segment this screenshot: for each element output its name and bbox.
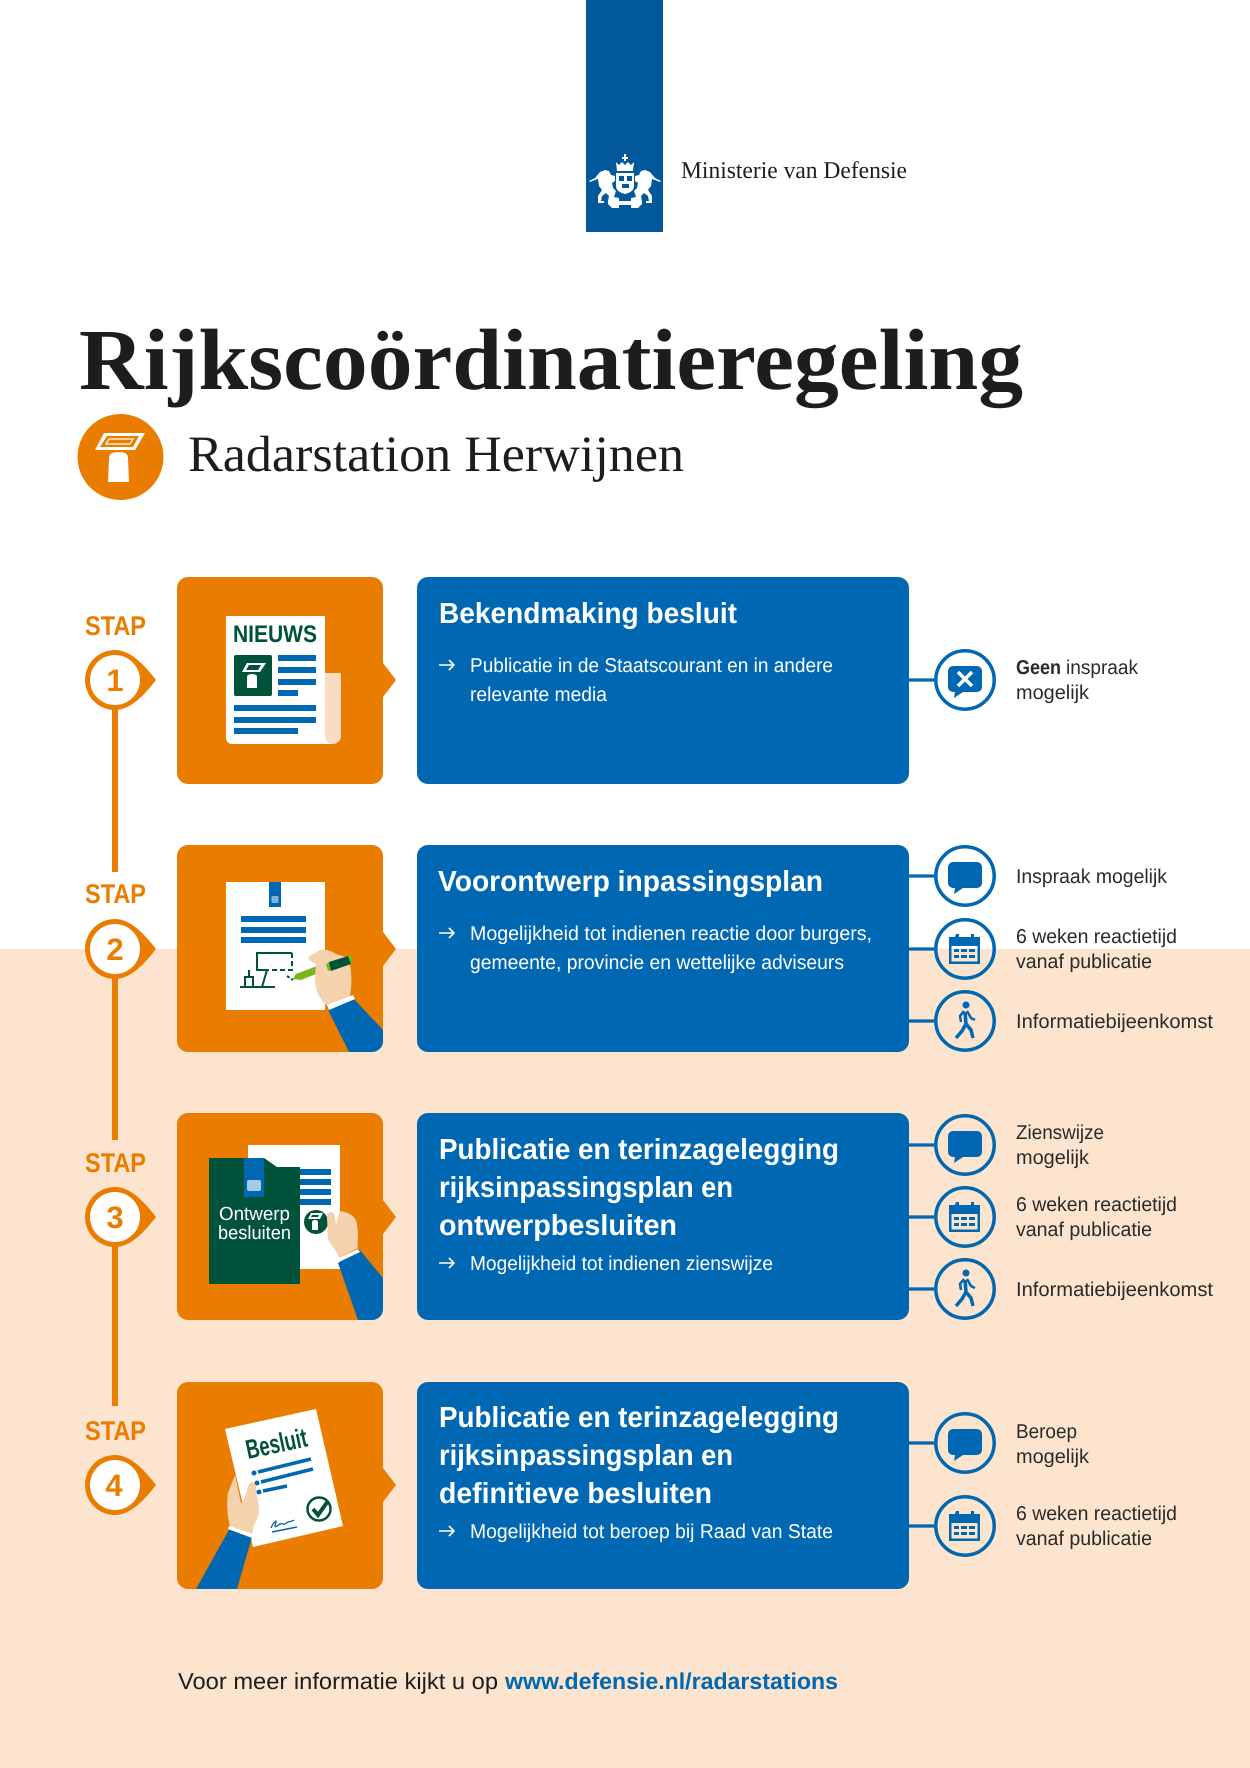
step marker 3 (85, 1148, 156, 1247)
panel: illustration step 4, signed decision: Besluit (243, 1423, 310, 1465)
panel: step 1 text (417, 577, 909, 784)
subtitle: Radarstation Herwijnen (188, 427, 684, 483)
step marker 1: 1 (106, 663, 124, 698)
panel: step 4 text: rijksinpassingsplan en (439, 1440, 733, 1472)
note: views possible (1016, 1122, 1104, 1169)
icon: walking person, step 3 (909, 1260, 994, 1318)
panel: step 4 text: definitieve besluiten (439, 1478, 712, 1510)
timeline lines (112, 705, 118, 1406)
icon: radar station (78, 414, 164, 500)
note: reaction time, step 4 (1016, 1503, 1177, 1550)
panel: step 4 text: Publicatie en terinzagelegging (439, 1402, 839, 1434)
note: appeal possible: Beroep (1016, 1421, 1077, 1443)
note: appeal possible: mogelijk (1016, 1446, 1090, 1468)
icon: crest (589, 154, 661, 208)
step marker 3: STAP (85, 1148, 146, 1178)
panel: step 1 text: Bekendmaking besluit (439, 598, 737, 630)
icon: no participation (909, 651, 994, 709)
note: reaction time, step 4: vanaf publicatie (1016, 1528, 1152, 1550)
step marker 4 (85, 1416, 156, 1515)
panel: step 3 text (417, 1113, 909, 1320)
note: reaction time, step 2: vanaf publicatie (1016, 951, 1152, 973)
panel: step 2 text: Voorontwerp inpassingsplan (438, 866, 823, 898)
panel: step 2 text: gemeente, provincie en wettelijke adviseurs (470, 952, 844, 974)
panel: step 1 text: Publicatie in de Staatscourant en in andere (470, 655, 833, 677)
icon: calendar, step 3 (909, 1188, 994, 1246)
note: no participation (1016, 657, 1139, 704)
panel: illustration step 1, newspaper (177, 577, 396, 784)
panel: step 2 text (417, 845, 909, 1052)
icon: calendar, step 2 (909, 920, 994, 978)
panel: illustration step 4, signed decision (177, 1382, 396, 1589)
panel: step 3 text: Mogelijkheid tot indienen zienswijze (470, 1253, 773, 1275)
note: reaction time, step 2: 6 weken reactietijd (1016, 926, 1177, 948)
note: reaction time, step 3: 6 weken reactietijd (1016, 1194, 1177, 1216)
footer (178, 1668, 838, 1694)
footer: www.defensie.nl/radarstations (504, 1668, 838, 1694)
panel: step 4 text: Mogelijkheid tot beroep bij Raad van State (470, 1521, 833, 1543)
icon: speech bubble, step 2 (909, 847, 994, 905)
panel: illustration step 3, draft decisions folder: besluiten (218, 1223, 291, 1244)
icon: speech bubble, step 3 (909, 1116, 994, 1174)
step marker 1 (85, 611, 156, 710)
note: reaction time, step 3 (1016, 1194, 1177, 1241)
panel: step 3 text: Publicatie en terinzagelegging (439, 1134, 839, 1166)
icon: speech bubble, step 4 (909, 1414, 994, 1472)
logo: Rijksoverheid ribbon with crest (586, 0, 663, 232)
icon: calendar, step 4 (909, 1497, 994, 1555)
panel: illustration step 1, newspaper: NIEUWS (233, 621, 317, 648)
ministry name: Ministerie van Defensie (681, 158, 907, 184)
title: Rijkscoördinatieregeling (79, 311, 1023, 409)
panel: step 1 text: relevante media (470, 684, 608, 706)
note: no participation: mogelijk (1016, 682, 1090, 704)
panel: step 3 text: rijksinpassingsplan en (439, 1172, 733, 1204)
step marker 2 (85, 879, 156, 979)
panel: illustration step 3, draft decisions folder (177, 1113, 396, 1320)
panel: illustration step 3, draft decisions folder: Ontwerp (219, 1204, 290, 1225)
panel: step 3 text: ontwerpbesluiten (439, 1210, 677, 1242)
step marker 1: STAP (85, 611, 146, 641)
footer: Voor meer informatie kijkt u op (178, 1668, 498, 1694)
note: no participation: Geen (1016, 657, 1061, 679)
note: reaction time, step 3: vanaf publicatie (1016, 1219, 1152, 1241)
note: no participation: inspraak (1066, 657, 1139, 679)
step marker 2: 2 (106, 932, 124, 967)
note: reaction time, step 4: 6 weken reactietijd (1016, 1503, 1177, 1525)
note: reaction time, step 2 (1016, 926, 1177, 973)
note: information meeting, step 3: Informatiebijeenkomst (1016, 1279, 1213, 1301)
step marker 3: 3 (106, 1200, 124, 1235)
note: views possible: mogelijk (1016, 1147, 1090, 1169)
icon: walking person, step 2 (909, 992, 994, 1050)
step marker 4: STAP (85, 1416, 146, 1446)
note: views possible: Zienswijze (1016, 1122, 1104, 1144)
step marker 2: STAP (85, 879, 146, 909)
note: information meeting, step 2: Informatiebijeenkomst (1016, 1011, 1213, 1033)
panel: step 2 text: Mogelijkheid tot indienen reactie door burgers, (470, 923, 872, 945)
panel: illustration step 2, drawing on plan (177, 845, 396, 1052)
note: participation: Inspraak mogelijk (1016, 866, 1168, 888)
step marker 4: 4 (105, 1468, 123, 1503)
note: appeal possible (1016, 1421, 1090, 1468)
panel: step 4 text (417, 1382, 909, 1589)
